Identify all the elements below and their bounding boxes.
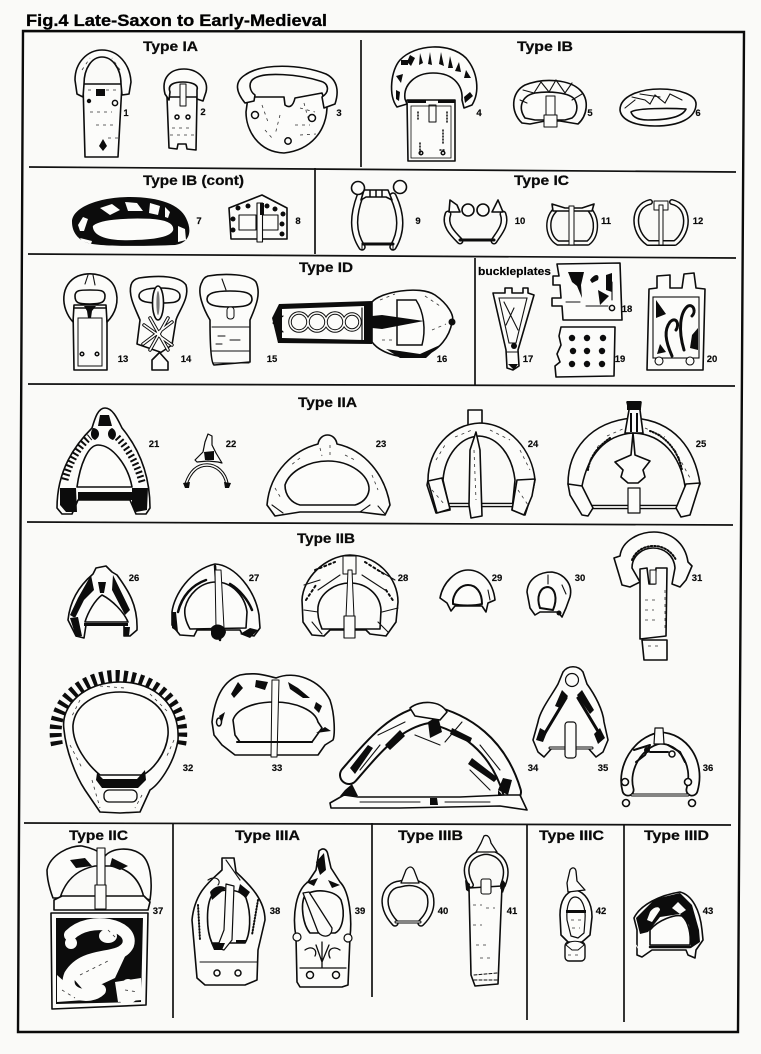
heading: Type IIA: Type IIA	[298, 395, 357, 410]
panel: Type IIA	[57, 395, 707, 518]
buckle 26: 26	[129, 573, 139, 584]
plate 17: 17	[523, 354, 533, 365]
heading: Type IIIA: Type IIIA	[235, 828, 300, 843]
buckle 23: 23	[376, 439, 386, 450]
buckle 43: 43	[703, 906, 713, 917]
buckle 2	[164, 69, 206, 150]
heading: Type IIC: Type IIC	[69, 828, 128, 843]
buckle 10: 10	[515, 216, 525, 227]
heading: Type IC: Type IC	[514, 173, 569, 188]
buckle 39	[293, 849, 365, 987]
panel: Type IC	[352, 173, 703, 250]
buckle 27: 27	[249, 573, 259, 584]
buckle 3: 3	[336, 108, 342, 119]
heading: Type IIIC: Type IIIC	[539, 828, 604, 843]
buckle 1	[75, 50, 131, 157]
heading: Type IIIB: Type IIIB	[398, 828, 463, 843]
buckle 21: 21	[149, 439, 160, 450]
plate 20: 20	[707, 354, 717, 365]
buckle 22: 22	[226, 439, 236, 450]
buckle 41: 41	[507, 906, 518, 917]
heading: Type IIID: Type IIID	[644, 828, 709, 843]
heading: Type IA: Type IA	[143, 39, 198, 54]
buckle 4: 4	[476, 108, 482, 119]
buckle 8	[229, 195, 301, 242]
buckle 39: 39	[355, 906, 365, 917]
panel: buckleplates	[478, 263, 717, 377]
buckle 6: 6	[695, 108, 701, 119]
plate 18: 18	[622, 304, 632, 315]
buckle 36	[622, 728, 713, 806]
plate 19: 19	[615, 354, 625, 365]
plate 17	[493, 288, 534, 370]
buckle 38	[192, 858, 280, 985]
buckle 11: 11	[601, 216, 612, 227]
buckle 32: 32	[183, 763, 193, 774]
buckle 37: 37	[153, 906, 163, 917]
buckle 5: 5	[587, 108, 593, 119]
buckle 28	[302, 555, 408, 638]
buckle 29: 29	[492, 573, 502, 584]
buckle 11	[549, 204, 612, 245]
buckle 15	[200, 274, 278, 365]
buckle 33	[212, 674, 334, 774]
buckle 40: 40	[438, 906, 448, 917]
buckle 38: 38	[270, 906, 280, 917]
buckle 30	[527, 572, 585, 617]
buckle 35: 35	[598, 763, 609, 774]
panel: Type ID	[64, 260, 455, 370]
panel: Type IIID	[634, 828, 713, 958]
buckle 15: 15	[267, 354, 278, 365]
heading: Type ID: Type ID	[299, 260, 353, 275]
buckle 1: 1	[123, 108, 129, 119]
buckle 8: 8	[295, 216, 301, 227]
buckle 13	[64, 274, 128, 370]
buckle 31: 31	[692, 573, 703, 584]
buckle 9: 9	[415, 216, 421, 227]
heading: buckleplates: buckleplates	[478, 266, 551, 278]
panel: Type IIIB	[385, 828, 518, 986]
buckle 29	[440, 570, 502, 612]
buckle 7	[72, 197, 202, 246]
buckle 6	[620, 89, 701, 126]
panel: Type IB continued	[72, 173, 301, 246]
buckle 14: 14	[181, 354, 192, 365]
buckle 25: 25	[696, 439, 707, 450]
buckle 37	[47, 846, 163, 1009]
buckle 30: 30	[575, 573, 585, 584]
buckle 22	[183, 434, 236, 488]
buckle 5	[514, 80, 593, 127]
buckle 16	[272, 290, 456, 365]
panel: Type IIIA	[192, 828, 365, 987]
buckle 9	[352, 180, 421, 250]
plate 18	[552, 263, 632, 320]
title: Fig.4 Late-Saxon to Early-Medieval	[26, 12, 327, 30]
buckle 3	[237, 66, 342, 153]
buckle 10	[447, 200, 525, 241]
plate 20	[647, 273, 717, 370]
buckle 33: 33	[272, 763, 282, 774]
panel: Type IB	[392, 39, 701, 161]
buckle 7: 7	[196, 216, 202, 227]
buckle 23	[267, 435, 390, 516]
buckle 36: 36	[703, 763, 713, 774]
heading: Type IB: Type IB	[517, 39, 573, 54]
heading: Type IIB: Type IIB	[297, 531, 355, 546]
buckle 12	[636, 201, 703, 245]
buckle 35	[533, 667, 609, 774]
buckle 12: 12	[693, 216, 703, 227]
buckle 41	[465, 835, 518, 986]
buckle 34	[330, 702, 539, 810]
buckle 32	[56, 676, 193, 813]
buckle 4	[392, 47, 482, 161]
buckle 25	[568, 401, 707, 517]
buckle 26	[68, 566, 139, 638]
buckle 28: 28	[398, 573, 408, 584]
buckle 21	[57, 408, 160, 514]
buckle 31	[614, 532, 703, 660]
panel: Type IA	[75, 39, 342, 157]
buckle 34: 34	[528, 763, 539, 774]
buckle 42: 42	[596, 906, 606, 917]
heading: Type IB (cont): Type IB (cont)	[143, 173, 244, 188]
panel: Type IIB	[56, 531, 713, 813]
panel: Type IIIC	[539, 828, 606, 961]
plate 19	[555, 327, 625, 377]
buckle 13: 13	[118, 354, 128, 365]
buckle 2: 2	[200, 107, 206, 118]
buckle 24	[427, 410, 539, 518]
buckle 16: 16	[437, 354, 447, 365]
buckle 14	[130, 276, 192, 370]
buckle 27	[172, 564, 260, 640]
buckle 24: 24	[528, 439, 539, 450]
buckle 40	[385, 867, 448, 923]
panel: Type IIC	[47, 828, 163, 1009]
